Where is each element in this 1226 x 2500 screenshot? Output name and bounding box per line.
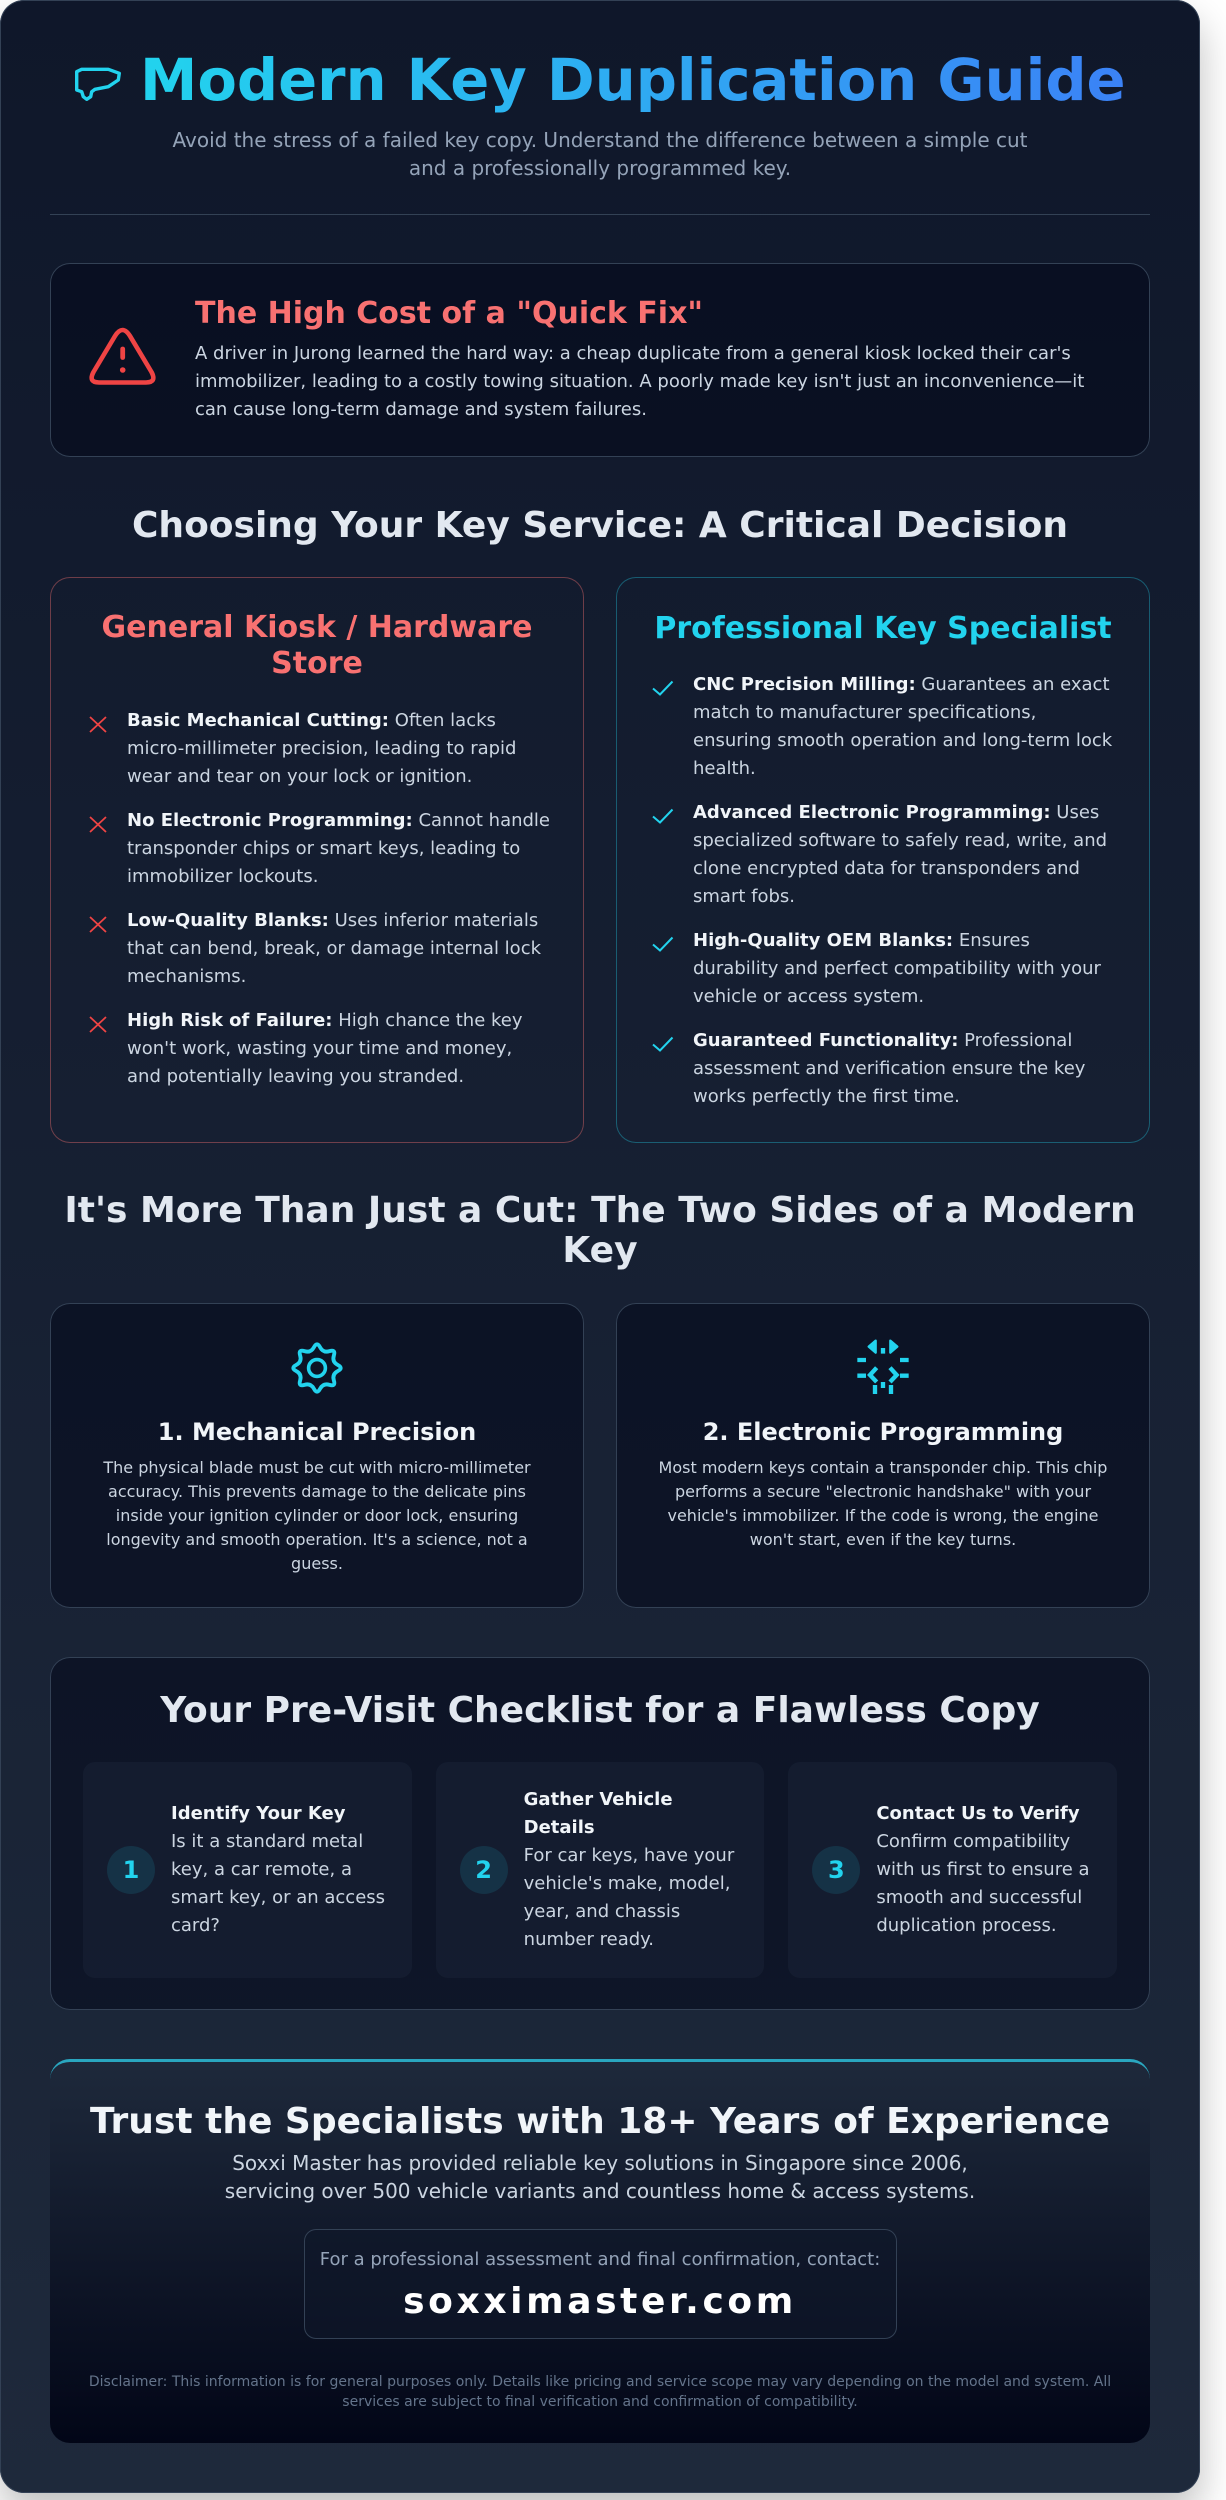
step 3 number: 3 <box>828 1856 845 1884</box>
kiosk item 1: wear and tear on your lock or ignition. <box>127 766 472 787</box>
specialist item 3: durability and perfect compatibility with your <box>693 958 1101 979</box>
step 1 number <box>107 1846 155 1894</box>
kiosk item 2 <box>127 810 550 887</box>
step 2 text: number ready. <box>524 1929 654 1950</box>
kiosk item 4: High Risk of Failure: High chance the key <box>127 1010 523 1031</box>
checklist heading: Your Pre-Visit Checklist for a Flawless Copy <box>160 1690 1040 1731</box>
electronic body: won't start, even if the key turns. <box>750 1530 1016 1548</box>
icon: cross 3 <box>89 916 107 933</box>
specialist item 4 <box>693 1030 1085 1107</box>
warning body: A driver in Jurong learned the hard way: a cheap duplicate from a general kiosk locked their car's <box>195 343 1071 364</box>
disclaimer: Disclaimer: This information is for general purposes only. Details like pricing and service scope may vary depending on the model and system. All <box>89 2374 1111 2390</box>
electronic body: performs a secure "electronic handshake" with your <box>675 1482 1091 1500</box>
kiosk heading: General Kiosk / Hardware <box>102 610 532 645</box>
title: Modern Key Duplication Guide <box>140 47 1126 114</box>
step 2 text: year, and chassis <box>524 1901 680 1922</box>
warning body: immobilizer, leading to a costly towing situation. A poorly made key isn't just an inconvenience—it <box>195 371 1084 392</box>
icon: cross 2 <box>89 816 107 833</box>
contact prompt: For a professional assessment and final confirmation, contact: <box>320 2249 880 2270</box>
mechanical body <box>103 1458 531 1572</box>
specialist item 1: ensuring smooth operation and long-term lock <box>693 730 1112 751</box>
mechanical body: The physical blade must be cut with micro-millimeter <box>103 1458 531 1476</box>
heading: two sides of a modern key: Key <box>562 1230 638 1270</box>
subtitle: and a professionally programmed key. <box>409 156 791 180</box>
panel: pre-visit checklist <box>50 1657 1150 2010</box>
step 3 <box>788 1762 1117 1978</box>
icon: key <box>75 68 121 101</box>
specialist item 4: assessment and verification ensure the key <box>693 1058 1085 1079</box>
warning body <box>195 343 1084 420</box>
contact website: soxximaster.com <box>403 2280 797 2322</box>
step 2 text <box>524 1789 734 1950</box>
kiosk item 1: Basic Mechanical Cutting: Often lacks <box>127 710 496 731</box>
step 3 text: Confirm compatibility <box>876 1831 1070 1852</box>
specialist heading: Professional Key Specialist <box>654 610 1112 646</box>
panel: mechanical precision <box>50 1303 584 1608</box>
step 2 number <box>460 1846 508 1894</box>
trust heading: Trust the Specialists with 18+ Years of Experience <box>90 2100 1110 2142</box>
warning heading: The High Cost of a "Quick Fix" <box>195 296 703 331</box>
icon: warning triangle <box>89 328 156 385</box>
step 2 <box>436 1762 764 1978</box>
subtitle: Avoid the stress of a failed key copy. Understand the difference between a simple cut <box>172 128 1028 152</box>
kiosk item 3: that can bend, break, or damage internal lock <box>127 938 541 959</box>
kiosk item 2: transponder chips or smart keys, leading to <box>127 838 520 859</box>
disclaimer <box>89 2374 1111 2410</box>
step 1 text <box>171 1803 385 1936</box>
trust body <box>225 2151 975 2203</box>
step 1 <box>83 1762 412 1978</box>
electronic body: Most modern keys contain a transponder chip. This chip <box>659 1458 1107 1476</box>
kiosk heading <box>102 610 532 681</box>
panel: trust the specialists <box>50 2059 1150 2443</box>
mechanical body: inside your ignition cylinder or door lock, ensuring <box>116 1506 518 1524</box>
kiosk item 4: and potentially leaving you stranded. <box>127 1066 464 1087</box>
specialist item 2: Advanced Electronic Programming: Uses <box>693 802 1099 823</box>
step 3 number <box>812 1846 860 1894</box>
step 3 text: smooth and successful <box>876 1887 1082 1908</box>
kiosk item 4 <box>127 1010 523 1087</box>
icon: gear <box>291 1342 343 1394</box>
specialist item 4: works perfectly the first time. <box>693 1086 960 1107</box>
panel: general kiosk <box>50 577 584 1143</box>
kiosk item 1: micro-millimeter precision, leading to rapid <box>127 738 516 759</box>
step 2 text: Gather Vehicle <box>524 1789 673 1810</box>
step 2 text: For car keys, have your <box>524 1845 734 1866</box>
specialist item 2: clone encrypted data for transponders and <box>693 858 1080 879</box>
specialist item 1 <box>693 674 1112 779</box>
step 1 text: smart key, or an access <box>171 1887 385 1908</box>
electronic heading: 2. Electronic Programming <box>703 1418 1063 1446</box>
step 1 text: card? <box>171 1915 220 1936</box>
specialist item 2: specialized software to safely read, write, and <box>693 830 1107 851</box>
step 2 text: Details <box>524 1817 595 1838</box>
step 3 text: duplication process. <box>876 1915 1057 1936</box>
icon: check 4 <box>652 1036 674 1052</box>
step 2 number: 2 <box>475 1856 492 1884</box>
heading: choosing your key service: Choosing Your Key Service: A Critical Decision <box>132 505 1068 546</box>
specialist item 3 <box>693 930 1101 1007</box>
trust body: servicing over 500 vehicle variants and countless home & access systems. <box>225 2179 975 2203</box>
kiosk heading: Store <box>271 646 363 681</box>
subtitle <box>172 128 1028 180</box>
specialist item 2 <box>693 802 1107 907</box>
heading: two sides of a modern key: It's More Than Just a Cut: The Two Sides of a Modern <box>64 1190 1136 1230</box>
mechanical heading: 1. Mechanical Precision <box>158 1418 476 1446</box>
step 1 text: key, a car remote, a <box>171 1859 352 1880</box>
specialist item 1: CNC Precision Milling: Guarantees an exact <box>693 674 1110 695</box>
step 3 text: Contact Us to Verify <box>876 1803 1080 1824</box>
panel: electronic programming <box>616 1303 1150 1608</box>
panel: high cost warning <box>50 263 1150 457</box>
specialist item 3: High-Quality OEM Blanks: Ensures <box>693 930 1030 951</box>
contact box <box>304 2229 896 2339</box>
kiosk item 4: won't work, wasting your time and money, <box>127 1038 512 1059</box>
step 1 text: Identify Your Key <box>171 1803 346 1824</box>
kiosk item 2: No Electronic Programming: Cannot handle <box>127 810 550 831</box>
kiosk item 3: Low-Quality Blanks: Uses inferior materials <box>127 910 538 931</box>
icon: check 1 <box>652 680 674 696</box>
mechanical body: guess. <box>291 1554 343 1572</box>
step 3 text: with us first to ensure a <box>876 1859 1090 1880</box>
specialist item 2: smart fobs. <box>693 886 795 907</box>
heading: two sides of a modern key <box>64 1190 1136 1270</box>
mechanical body: accuracy. This prevents damage to the delicate pins <box>108 1482 526 1500</box>
icon: check 2 <box>652 808 674 824</box>
specialist item 3: vehicle or access system. <box>693 986 924 1007</box>
panel: professional specialist <box>616 577 1150 1143</box>
icon: cross 4 <box>89 1016 107 1033</box>
kiosk item 3 <box>127 910 541 987</box>
icon: check 3 <box>652 936 674 952</box>
warning body: can cause long-term damage and system failures. <box>195 399 647 420</box>
step 2 text: vehicle's make, model, <box>524 1873 730 1894</box>
kiosk item 3: mechanisms. <box>127 966 246 987</box>
disclaimer: services are subject to final verification and confirmation of compatibility. <box>342 2394 858 2410</box>
mechanical body: longevity and smooth operation. It's a science, not a <box>106 1530 528 1548</box>
icon: chip <box>857 1340 909 1394</box>
specialist item 1: health. <box>693 758 756 779</box>
trust body: Soxxi Master has provided reliable key solutions in Singapore since 2006, <box>232 2151 968 2175</box>
electronic body <box>659 1458 1107 1548</box>
specialist item 4: Guaranteed Functionality: Professional <box>693 1030 1072 1051</box>
electronic body: vehicle's immobilizer. If the code is wrong, the engine <box>667 1506 1099 1524</box>
step 1 number: 1 <box>123 1856 139 1884</box>
step 3 text <box>876 1803 1090 1936</box>
specialist item 1: match to manufacturer specifications, <box>693 702 1036 723</box>
icon: cross 1 <box>89 716 107 733</box>
kiosk item 2: immobilizer lockouts. <box>127 866 318 887</box>
kiosk item 1 <box>127 710 516 787</box>
step 1 text: Is it a standard metal <box>171 1831 363 1852</box>
